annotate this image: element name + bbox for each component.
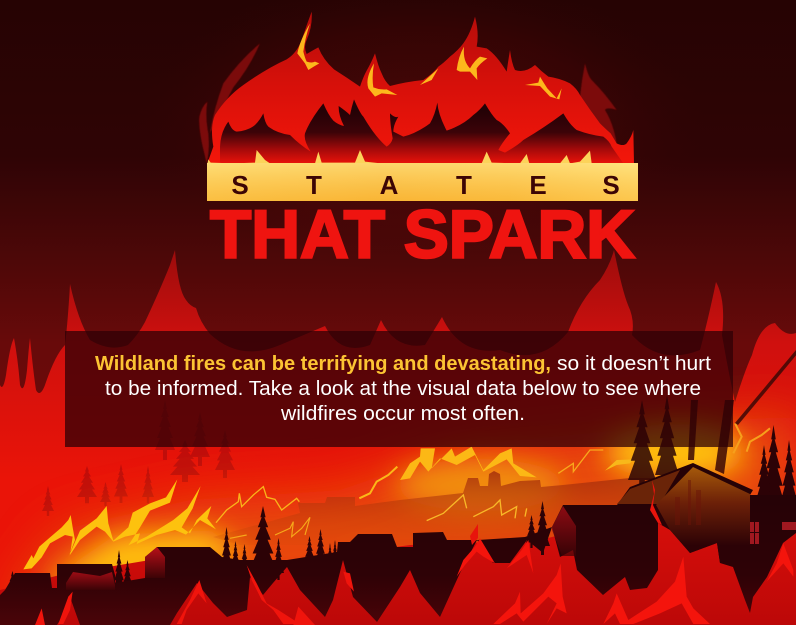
foreground trees — [5, 425, 796, 607]
dark hollows inside the flame — [220, 99, 623, 163]
house frame posts — [688, 350, 796, 474]
bright red cracks left — [35, 565, 354, 625]
title bar: STATES: E — [529, 170, 547, 200]
burning curls on the houses — [470, 480, 662, 545]
flame title artwork — [199, 12, 638, 164]
town silhouette — [0, 463, 796, 625]
trees behind house — [628, 395, 679, 496]
intro text: Wildland fires can be terrifying and devastating, — [95, 352, 551, 375]
background flames — [0, 250, 796, 625]
yellow spikes along the bar — [207, 150, 638, 164]
title: THAT SPARK: THAT SPARK — [210, 196, 635, 272]
title bar: STATES: T — [306, 170, 322, 200]
intro text: to be informed. Take a look at the visual data below to see where — [105, 377, 701, 400]
intro text — [95, 352, 711, 425]
main flame body — [207, 12, 634, 163]
yellow flame licks left — [23, 467, 397, 569]
faint distant trees — [42, 400, 235, 516]
burning floor — [0, 500, 796, 625]
intro text: wildfires occur most often. — [280, 402, 525, 425]
lit house walls — [66, 467, 796, 590]
title bar: STATES: S — [602, 170, 620, 200]
title glow — [135, 0, 705, 275]
intro panel — [65, 331, 733, 447]
title bar: STATES: T — [456, 170, 472, 200]
flame outer wisps — [199, 43, 617, 163]
title bar: STATES: A — [380, 170, 399, 200]
intro text: so it doesn’t hurt — [557, 352, 711, 375]
bright red cracks right — [457, 538, 793, 624]
title bar: STATES — [207, 163, 638, 201]
yellow flame licks right — [400, 423, 770, 521]
title bar: STATES: S — [231, 170, 249, 200]
distant hill and town — [213, 471, 660, 545]
yellow licks in flame — [297, 23, 562, 99]
fire glow — [10, 415, 796, 625]
